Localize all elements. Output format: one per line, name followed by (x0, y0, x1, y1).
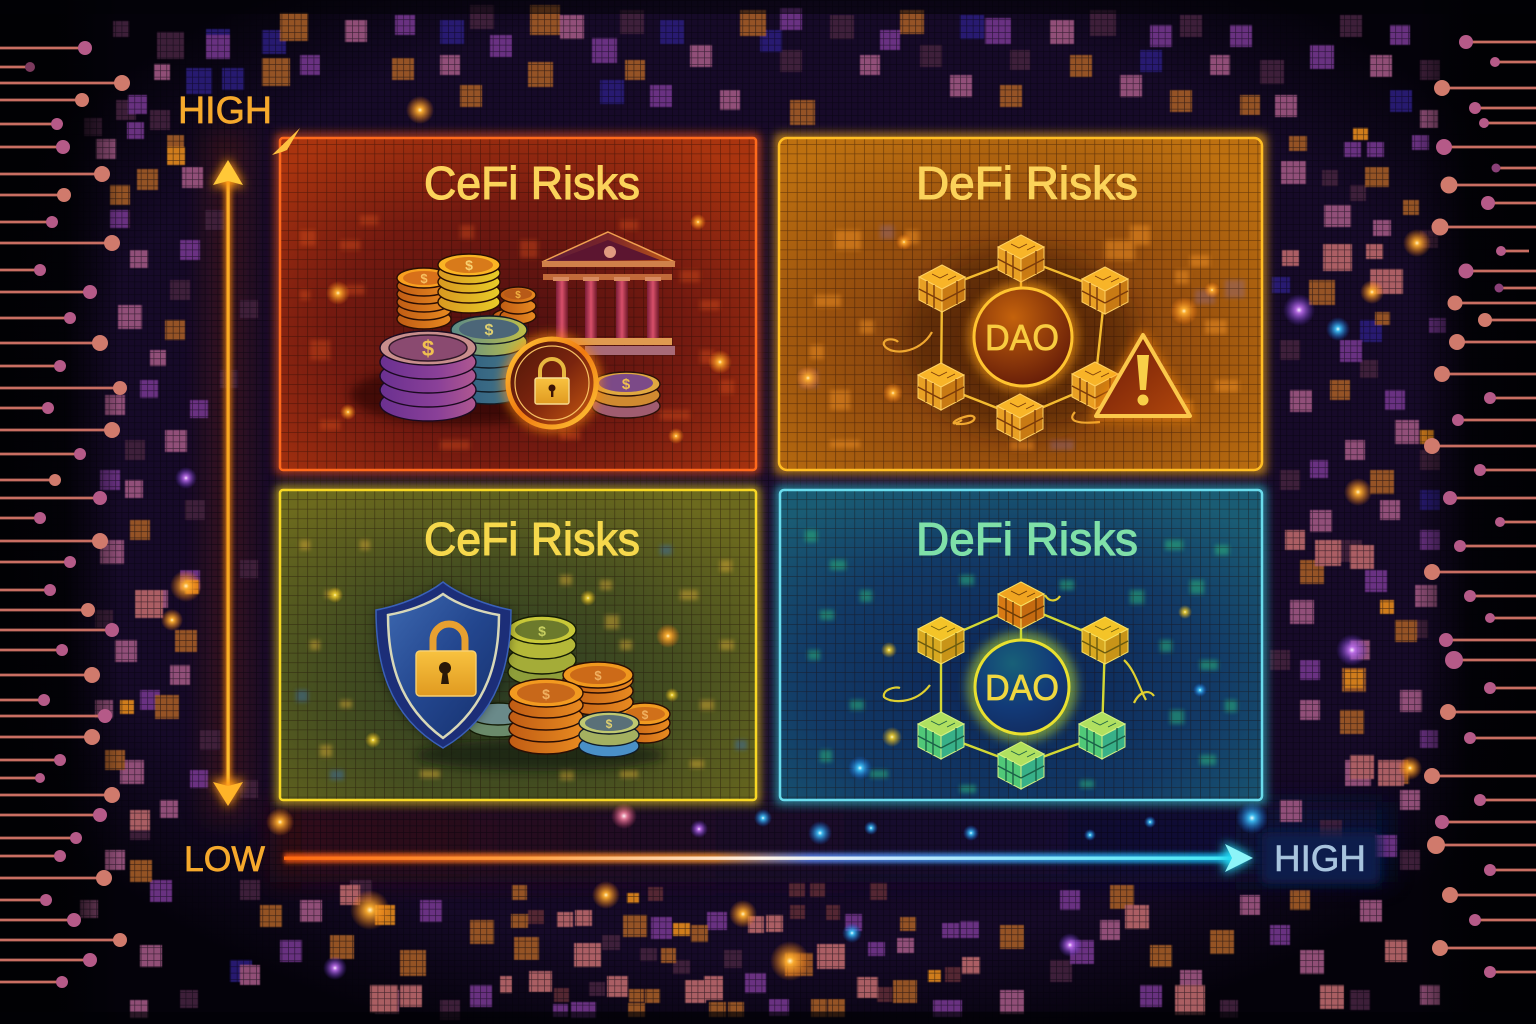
DAO badge (968, 282, 1078, 392)
swirl marks (884, 332, 1100, 424)
coin stack: olive tall (468, 616, 576, 737)
panel: DeFi Risks low (780, 490, 1262, 800)
coin stack: back orange: $ (515, 290, 521, 301)
node cubes (918, 235, 1128, 441)
coin stack: right orange: $ (642, 708, 649, 722)
swirl marks (884, 595, 1154, 703)
icon: DAO network blue (884, 582, 1154, 789)
node cubes: green (918, 712, 1125, 789)
coin stack: purple (380, 331, 476, 421)
panel: CeFi Risks high (272, 128, 756, 470)
panel glow halos (280, 138, 1262, 800)
DAO badge: DAO (985, 667, 1059, 708)
background sparkles (161, 96, 1431, 981)
coin stack: teal: $ (485, 322, 494, 339)
horizontal axis label: HIGH (1262, 832, 1380, 884)
horizontal axis label: HIGH: HIGH (1274, 838, 1366, 879)
coin stack: teal (451, 316, 527, 404)
coin stack: yellow (438, 254, 500, 313)
horizontal axis label: LOW: LOW (184, 840, 265, 879)
panel: DeFi Risks high (779, 138, 1262, 470)
coin stack: middle orange (563, 662, 633, 715)
coin stack: blue: $ (606, 717, 613, 731)
icon: shield and coin stacks (375, 582, 670, 771)
coin stack: small right (592, 372, 660, 418)
right circuit traces (1424, 35, 1536, 978)
coin stack: yellow: $ (465, 257, 473, 273)
coin stack: purple: $ (422, 336, 434, 361)
warning triangle (1093, 333, 1192, 418)
coin stack: front orange (509, 679, 583, 754)
coin stack: right orange (620, 703, 670, 743)
panel heading: CeFi Risks low: CeFi Risks (424, 513, 640, 565)
lock medallion (502, 333, 602, 433)
coin stack: olive tall: $ (538, 623, 546, 639)
vertical axis arrow (212, 158, 244, 808)
panel heading: DeFi Risks low: DeFi Risks (916, 513, 1138, 565)
horizontal axis arrow (284, 842, 1254, 874)
left circuit traces (0, 41, 130, 988)
vertical axis label: HIGH: HIGH (178, 90, 272, 132)
coin stack: orange: $ (420, 271, 428, 286)
shield (375, 582, 512, 748)
panel heading: CeFi Risks high: CeFi Risks (424, 157, 640, 209)
coin stack: small right: $ (622, 376, 631, 393)
coin stack: back orange (493, 287, 536, 324)
DAO badge (967, 632, 1077, 742)
icon: coin stacks and lock (350, 254, 660, 433)
coin stack: blue (579, 712, 639, 757)
coin stack: orange (397, 268, 451, 329)
panel: CeFi Risks low (280, 490, 756, 800)
icon: DAO network orange (884, 235, 1192, 441)
coin stack: middle orange: $ (594, 668, 602, 683)
icon: bank building (542, 232, 675, 355)
DAO badge: DAO (985, 317, 1059, 358)
panel corner flare (272, 128, 300, 155)
node cubes: yellow (918, 582, 1128, 664)
panel heading: DeFi Risks high: DeFi Risks (916, 157, 1138, 209)
coin stack: front orange: $ (542, 686, 550, 702)
